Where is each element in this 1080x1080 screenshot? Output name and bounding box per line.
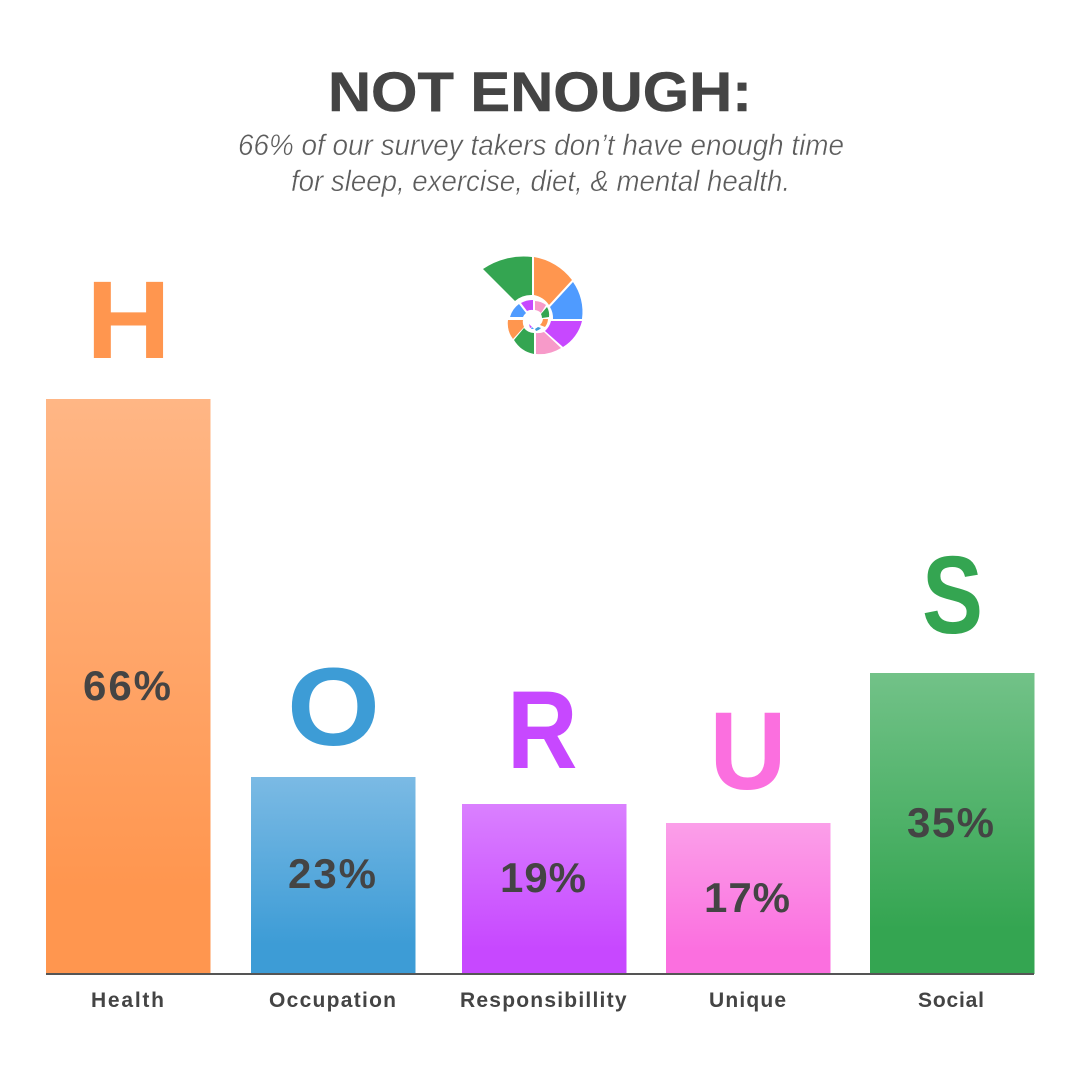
letter R: R: [507, 669, 578, 792]
bar: Unique: [666, 690, 830, 974]
subtitle: [238, 129, 844, 198]
value: 19%: 19%: [500, 854, 586, 901]
value: 35%: 35%: [907, 799, 994, 846]
letter S: S: [922, 534, 983, 657]
icon: spiral shell logo: [483, 257, 582, 354]
category labels: Social: [918, 989, 984, 1012]
bar: Social: [870, 534, 1034, 974]
value: 17%: 17%: [704, 874, 790, 921]
value: 66%: 66%: [83, 662, 171, 709]
letter H: H: [86, 259, 171, 382]
subtitle: for sleep, exercise, diet, & mental health.: [291, 165, 790, 198]
subtitle: 66% of our survey takers don’t have enough time: [238, 129, 844, 162]
letter U: U: [710, 690, 786, 813]
category labels: Occupation: [269, 989, 396, 1012]
category labels: [91, 989, 984, 1012]
letter O: O: [287, 646, 380, 769]
bar: Health: [46, 259, 210, 974]
title: NOT ENOUGH:: [328, 60, 752, 123]
category labels: Responsibillity: [460, 989, 627, 1012]
bar: Occupation: [251, 646, 416, 974]
category labels: Health: [91, 989, 164, 1012]
value: 23%: 23%: [288, 850, 376, 897]
bar: Responsibility: [462, 669, 626, 974]
baseline axis: [46, 973, 1034, 975]
category labels: Unique: [709, 989, 786, 1012]
